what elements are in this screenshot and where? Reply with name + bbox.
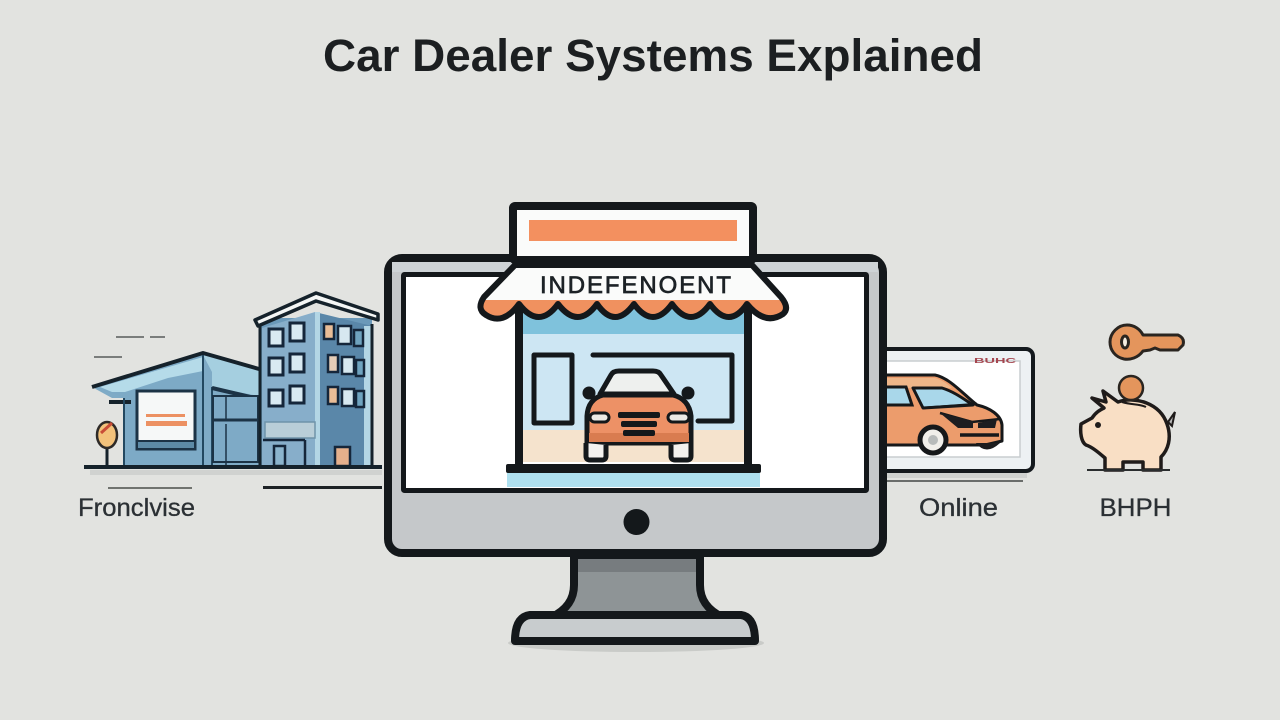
icon: orange car in profile xyxy=(880,375,1002,453)
awning scallops xyxy=(480,300,787,319)
monitor camera xyxy=(624,509,650,535)
ground lines xyxy=(84,465,382,489)
icon: round road sign xyxy=(97,422,117,466)
awning label: INDEFENOENT xyxy=(540,272,731,299)
monitor top strip xyxy=(392,262,878,272)
sign orange panel xyxy=(529,220,737,241)
icon: office tower xyxy=(255,293,378,466)
monitor base xyxy=(515,615,755,641)
monitor screen xyxy=(404,274,866,490)
monitor shadow xyxy=(508,634,764,652)
label: Franchise: Fronclvise xyxy=(78,494,195,522)
icon: motion dashes xyxy=(94,337,165,357)
panel: central monitor xyxy=(388,258,883,652)
title: Car Dealer Systems Explained xyxy=(323,30,983,81)
icon: orange car front xyxy=(582,371,694,460)
panel: online dealership xyxy=(870,349,1033,522)
icon: piggy bank with coin xyxy=(1081,376,1175,471)
tower front windows xyxy=(269,323,304,406)
listing card: BUHC xyxy=(974,358,1016,365)
panel: buy here pay here xyxy=(1081,325,1183,522)
label: BHPH: BHPH xyxy=(1100,494,1172,522)
panel: independent storefront xyxy=(480,206,787,487)
icon: low showroom building xyxy=(92,353,259,466)
store window xyxy=(534,355,572,423)
panel: franchise dealership xyxy=(78,293,382,522)
monitor body xyxy=(388,258,883,553)
listing card xyxy=(870,349,1033,482)
awning outline xyxy=(480,265,786,319)
store sign xyxy=(513,206,753,260)
monitor stand xyxy=(552,555,722,617)
icon: key xyxy=(1110,325,1183,359)
label: Online: Online xyxy=(919,494,998,522)
store counter xyxy=(506,464,761,487)
tower side windows xyxy=(324,324,364,407)
showroom window outline xyxy=(593,355,732,421)
awning xyxy=(480,265,787,319)
store walls xyxy=(519,304,748,466)
